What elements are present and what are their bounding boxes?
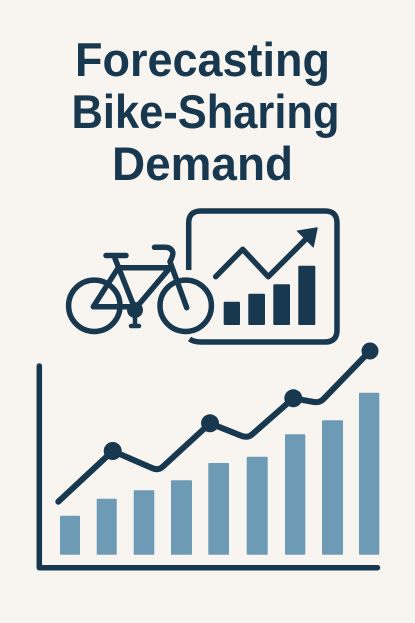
trend arrow xyxy=(216,228,317,277)
frame xyxy=(93,258,170,309)
bar chart xyxy=(39,342,379,568)
trend line xyxy=(58,351,370,502)
data points xyxy=(104,342,378,460)
title: Demand xyxy=(112,138,293,191)
saddle xyxy=(106,253,126,258)
bars xyxy=(60,393,379,555)
axes xyxy=(39,366,378,568)
mini bars xyxy=(224,266,315,325)
card outline xyxy=(189,211,337,342)
title xyxy=(72,34,340,191)
title: Forecasting xyxy=(75,34,330,87)
icon: bicycle xyxy=(69,247,211,331)
crank and pedal xyxy=(128,304,142,326)
rear wheel xyxy=(69,280,120,331)
fork and handlebar xyxy=(154,247,187,308)
front wheel xyxy=(160,280,211,331)
title: Bike-Sharing xyxy=(72,86,340,139)
icon: chart card xyxy=(189,211,337,342)
